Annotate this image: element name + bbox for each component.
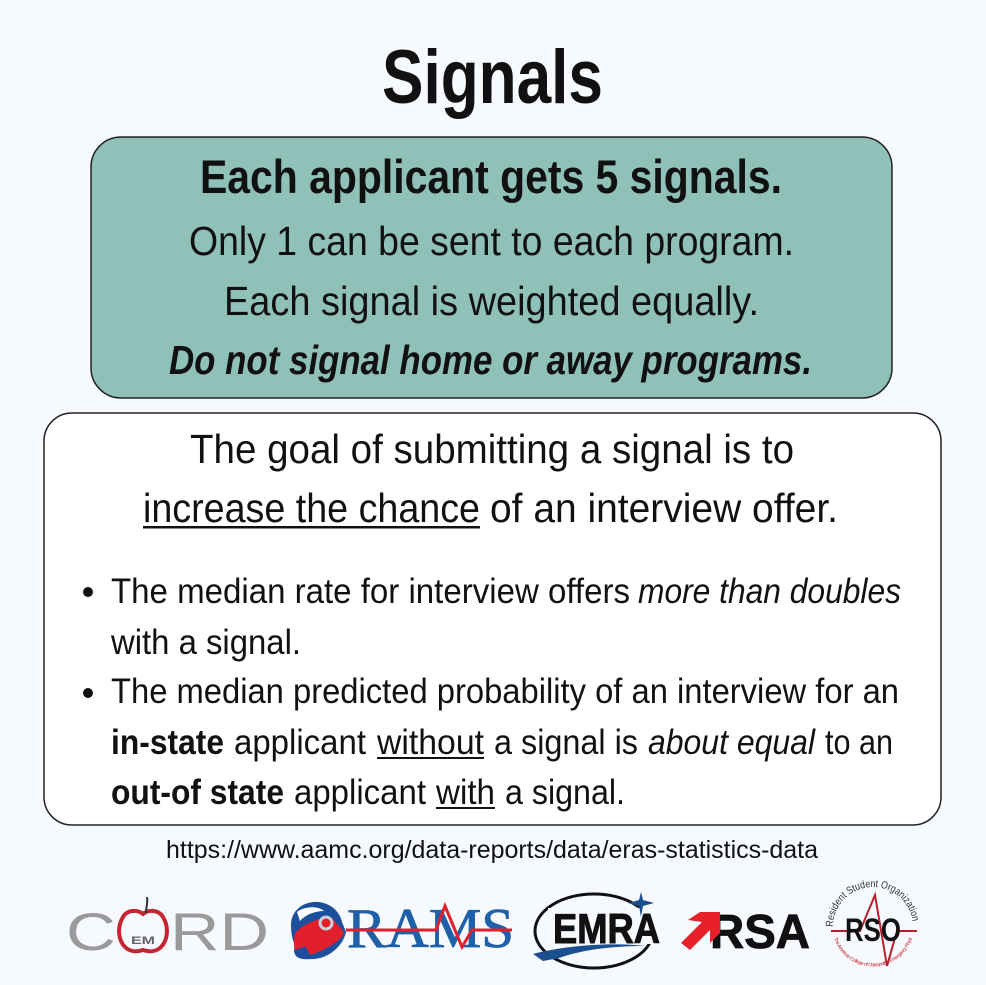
bullet: predicted probability: with [435,773,495,812]
panel: signal rules [91,137,892,398]
title: Signals [382,35,603,120]
logo: RSO: RSO [845,912,901,948]
bullet: predicted probability: in-state [111,723,224,762]
text: goal statement [143,426,838,531]
text: goal statement: increase the chance [143,485,480,531]
text: one per program: Only 1 can be sent to each program. [189,218,794,264]
heading: each applicant gets 5 signals: Each applicant gets 5 signals. [200,150,782,203]
logo: CORD [66,897,269,962]
logo: RSA: RSA [710,906,810,959]
text: goal statement: The goal of submitting a signal is to [190,426,794,472]
bullet: predicted probability: out-of state [111,773,284,812]
bullet: predicted probability: a signal. [505,773,625,812]
logo: RAMS: RAMS [347,898,514,960]
bullet: predicted probability: a signal is [494,723,638,762]
source url: https://www.aamc.org/data-reports/data/eras-statistics-data [166,836,818,864]
logo: RSO: Resident Student Organization [826,880,918,926]
logo: RSO: The American College of Osteopathic Emergency Physicians [834,936,912,967]
bullet: predicted probability: applicant [234,723,366,762]
bullet: predicted probability: about equal [648,723,816,762]
text: weighted equally: Each signal is weighted equally. [224,278,759,324]
text: goal statement: of an interview offer. [490,485,838,531]
logo: CORD: RD [170,903,269,962]
bullet: predicted probability: applicant [294,773,426,812]
bullet: predicted probability: to an [825,723,893,762]
logo: CORD: C [66,903,116,962]
bullet: median rate: with a signal. [110,623,301,662]
panel: goal of signals [44,413,941,825]
bullet: predicted probability [83,672,899,812]
bullet: predicted probability: The median predicted probability of an interview for an [111,672,899,711]
logo: EMRA: EMRA [553,905,660,952]
logo: EMRA [533,892,660,968]
bullet: predicted probability: without [376,723,484,762]
bullet: median rate [83,572,901,662]
bullet: median rate: The median rate for interview offers [111,572,630,611]
text: do not signal home or away: Do not signal home or away programs. [169,337,812,383]
icon: red arrow [681,912,720,950]
bullet: median rate: more than doubles [638,572,901,611]
logo: CORD: EM [131,935,155,947]
